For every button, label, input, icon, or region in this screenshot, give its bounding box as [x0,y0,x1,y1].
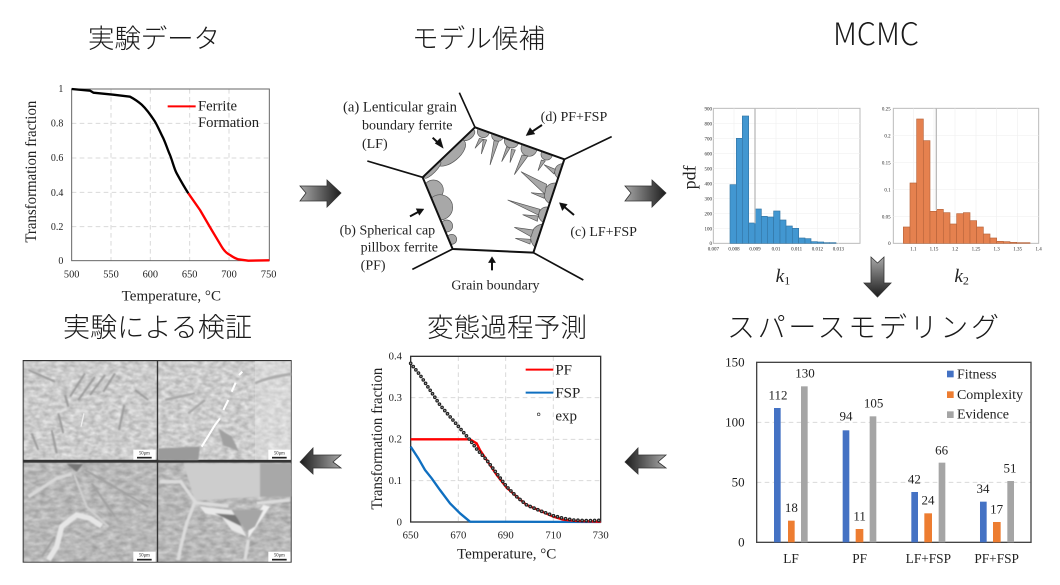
x axis title: Temperature, °C [457,547,556,563]
experimental points [411,363,601,521]
legend: ferrite formation: Formation [198,115,260,131]
title: MCMC: MCMC [833,9,919,54]
chart: experimental transformation curve [23,84,276,305]
complexity bars [788,513,1001,542]
legend [526,362,580,424]
y tick labels: 0.2 [389,435,402,446]
value labels: 130 [795,366,815,381]
label k1: k [776,266,784,287]
micrograph: top left [24,361,157,460]
histogram k2: 1.35 [1013,248,1023,253]
diagram labels: (b) Spherical cap [340,223,435,238]
evidence bars [801,386,1014,542]
legend: FSP [555,385,580,401]
y axis title: Transformation fraction [23,100,40,243]
title: experimental data: 実験データ [88,17,220,56]
histogram k1: 0.012 [812,248,823,253]
diagram: grain boundary ferrite morphologies [340,93,637,293]
y axis labels: 100 [725,415,745,430]
y tick labels: 0 [58,256,63,267]
x tick labels [64,269,276,280]
title: experimental validation: 実験による検証 [63,306,252,345]
x tick labels [403,531,609,542]
y tick labels: 0 [397,517,402,528]
y tick labels: 0.4 [389,352,403,363]
histogram k2 [882,108,1042,253]
diagram labels: (a) Lenticular grain [343,100,458,116]
y axis labels [725,355,745,550]
micrograph panel grid [23,360,292,563]
diagram labels: (LF) [362,137,388,152]
pdf label: pdf [679,165,699,189]
value labels: 51 [1004,460,1016,475]
y tick labels: 0.3 [389,393,402,404]
micrograph: top right: 50μm [274,452,285,457]
micrograph: bottom left [24,463,157,562]
value labels: 18 [785,500,798,515]
histogram k2: 1.15 [930,248,939,253]
diagram labels: boundary ferrite [362,118,452,133]
black curve [72,89,188,193]
label k2: 2 [963,274,969,288]
histogram k1: 300 [705,197,712,202]
x tick labels: 600 [143,269,158,280]
histogram k2: 0 [888,242,891,247]
legend: Complexity [957,388,1023,403]
y tick labels: 0.1 [389,476,402,487]
diagram labels: Grain boundary [451,278,539,293]
value labels: 34 [977,481,990,496]
diagram labels: (c) LF+FSP [570,225,637,240]
y axis labels: 0 [738,535,745,550]
x axis labels: LF+FSP [906,551,951,566]
y tick labels: 0.8 [51,118,63,129]
micrograph: bottom right: 50μm [274,554,285,559]
diagram labels [340,100,637,293]
legend: Fitness [957,368,997,383]
histogram k2: 0.15 [882,161,891,166]
legend: ferrite formation: Ferrite [198,98,237,114]
arrow: models to MCMC [625,180,666,207]
legend: Evidence [957,408,1009,423]
micrograph: top right [158,361,291,460]
x tick labels: 690 [498,531,514,542]
y tick labels: 0.4 [51,188,63,199]
x tick labels: 650 [182,269,197,280]
x tick labels: 650 [403,531,419,542]
y tick labels [389,352,403,528]
x tick labels: 710 [545,531,561,542]
histogram k1: 800 [705,122,712,127]
histogram k1: 200 [705,212,712,217]
value labels: 42 [908,471,921,486]
histogram k1: 0.01 [772,248,781,253]
fitness bars [774,408,987,542]
y tick labels: 0.2 [51,222,63,233]
label k1: 1 [784,274,790,288]
chart: transformation process prediction [369,352,609,563]
value labels: 94 [840,409,853,424]
micrograph: bottom right [158,463,291,562]
x axis labels [783,551,1019,566]
histogram k1: 600 [705,152,712,157]
value labels: 11 [853,509,866,524]
value labels: 66 [935,442,949,457]
micrograph: bottom left: 50μm [139,554,150,559]
arrow: data to models [300,180,341,207]
histogram k2: 0.25 [882,108,891,113]
x axis title: Temperature, °C [122,289,221,305]
histogram k2: 1.4 [1036,248,1042,253]
histogram k1: 0.013 [833,248,844,253]
title: process prediction: 変態過程予測 [427,306,587,345]
x tick labels: 670 [450,531,466,542]
histogram k2: 0.1 [884,188,891,193]
histogram k1: 0.008 [728,248,740,253]
diagram labels: (d) PF+FSP [541,110,607,125]
title: model candidates: モデル候補 [412,17,545,56]
label k2: k [954,266,963,287]
histogram k1: 0.009 [749,248,761,253]
value labels: 24 [922,493,935,508]
x tick labels: 500 [64,269,79,280]
y tick labels: 1 [58,84,63,95]
y tick labels [51,84,63,267]
histogram k2: 0.2 [884,134,891,139]
title: sparse modeling: スパースモデリング [727,306,999,346]
histogram k1: 100 [705,227,712,232]
y axis title: Transformation fraction [369,367,386,510]
histogram k1: 0.011 [791,248,803,253]
micrograph: top left: 50μm [139,452,150,457]
legend: ferrite formation [168,98,260,131]
grain boundary polygon [423,127,564,253]
pointer arrows [410,125,574,270]
FSP curve [411,447,601,522]
histogram k1: 900 [705,108,712,113]
ferrite grains [424,129,562,247]
histogram k2: 0.05 [882,215,891,220]
y tick labels: 0.6 [51,153,63,164]
outer boundaries [367,93,612,280]
histogram k2: 1.2 [952,248,959,253]
side plates [475,138,555,244]
x tick labels: 700 [221,269,237,280]
value labels: 112 [768,387,787,402]
histogram k1: 0.007 [708,248,719,253]
y axis labels: 150 [725,355,745,370]
histogram k1: 0 [709,242,712,247]
value labels [768,366,1016,524]
arrow: sparse modeling to prediction [625,448,666,474]
legend [947,368,1023,423]
diagram labels: pillbox ferrite [361,241,438,256]
histogram k2: 1.25 [972,248,981,253]
chart: MCMC histograms [679,108,1042,288]
x axis labels: LF [783,551,799,566]
red ferrite curve [188,193,269,261]
legend: exp [555,408,577,424]
legend: PF [555,362,572,378]
x tick labels: 550 [103,269,119,280]
value labels: 17 [990,501,1004,516]
chart: sparse modeling bar chart [725,355,1031,566]
x axis labels: PF [852,551,867,566]
PF curve [411,439,601,522]
histogram k2: 1.1 [910,248,917,253]
histogram k2: 1.3 [994,248,1000,253]
x tick labels: 750 [261,269,276,280]
histogram k1: 700 [705,137,712,142]
histogram k1 [705,108,860,253]
histogram k1: 400 [705,182,712,187]
y axis labels: 50 [732,475,745,490]
x axis labels: PF+FSP [974,551,1019,566]
arrow: prediction to validation [300,448,341,474]
arrow: MCMC to sparse modeling [864,257,891,297]
x tick labels: 730 [593,531,609,542]
diagram labels: (PF) [361,258,386,273]
histogram k1: 500 [705,167,712,172]
value labels: 105 [864,395,883,410]
